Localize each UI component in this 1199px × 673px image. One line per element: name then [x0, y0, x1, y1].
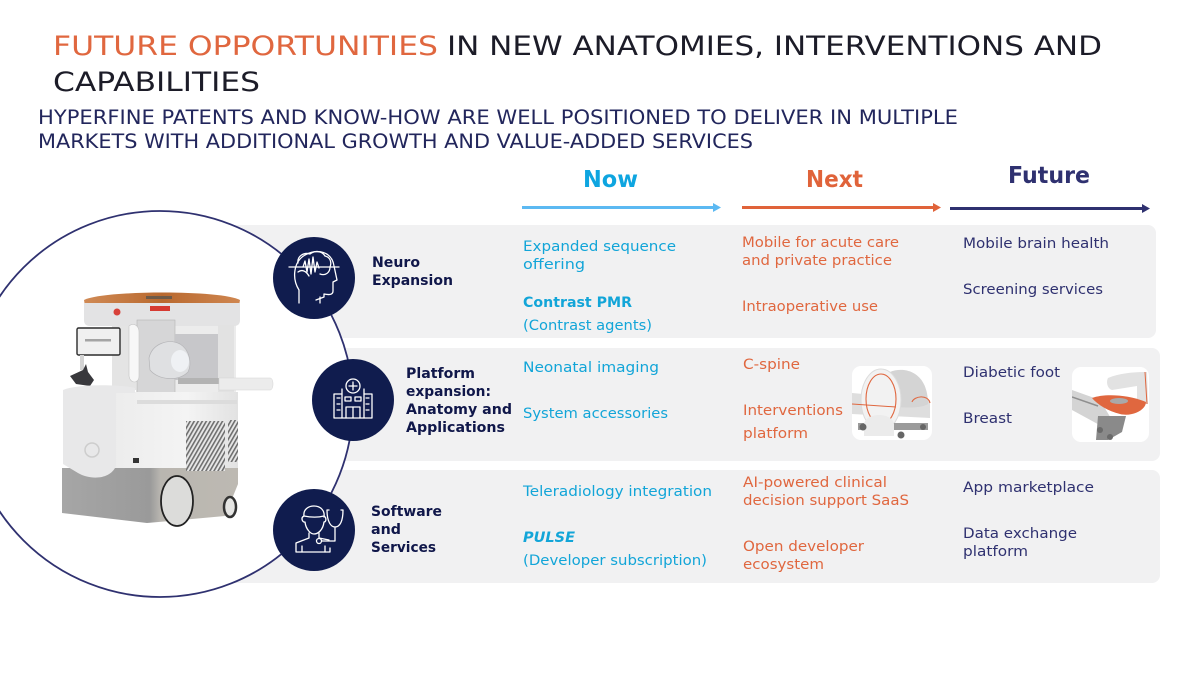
Future column text: neuro: Mobile brain health: [963, 236, 1109, 252]
Now column text: neuro: [523, 239, 676, 334]
Next column text: software: [743, 475, 909, 573]
row label: Platform expansion: expansion:: [406, 384, 491, 400]
row label: Software and Services: and: [371, 522, 401, 538]
Next column text: neuro: [742, 235, 899, 315]
panel: software and services background: [200, 470, 1160, 583]
Now column text: software: [522, 484, 712, 569]
column header: Next: Next: [806, 167, 863, 193]
Next column text: neuro: and private practice: [742, 253, 892, 269]
Next column text: platform: platform: [743, 426, 808, 442]
large circle: [0, 211, 353, 597]
Now column text: neuro: offering: [523, 257, 585, 273]
Next column text: software: decision support SaaS: [743, 493, 909, 509]
row label: Software and Services: [371, 504, 442, 556]
device top orange disc: [84, 292, 240, 306]
Now column text: platform: System accessories: [523, 406, 668, 422]
device illustration: [62, 292, 273, 526]
Next column text: platform: Interventions: [743, 403, 843, 419]
Now column text: software: PULSE: [523, 530, 575, 546]
title: CAPABILITIES: [53, 67, 260, 98]
Future column text: software: platform: [963, 544, 1028, 560]
column header: Future: Future: [1008, 163, 1090, 189]
Now column text: neuro: Expanded sequence: [523, 239, 676, 255]
row label: Platform expansion: [406, 366, 512, 436]
device joystick: [70, 364, 94, 386]
thumbnail: interventions platform scanner: [852, 366, 932, 440]
subtitle: MARKETS WITH ADDITIONAL GROWTH AND VALUE-ADDED SERVICES: [38, 130, 753, 153]
Now column text: software: Teleradiology integration: [522, 484, 712, 500]
column header: Future: [950, 163, 1150, 213]
Next column text: software: Open developer: [743, 539, 864, 555]
Next column text: software: ecosystem: [743, 557, 824, 573]
Next column text: neuro: Mobile for acute care: [742, 235, 899, 251]
Now column text: platform: [523, 360, 668, 422]
device lower body: [110, 392, 238, 472]
row label: Neuro Expansion: Neuro: [372, 255, 420, 271]
device screen: [77, 328, 120, 355]
Future column text: platform: Breast: [963, 411, 1013, 427]
panel: platform expansion background: [200, 348, 1160, 461]
Next column text: software: AI-powered clinical: [743, 475, 887, 491]
title: FUTURE OPPORTUNITIES: [53, 31, 438, 62]
subtitle: [38, 106, 958, 153]
Future column text: software: App marketplace: [963, 480, 1094, 496]
Future column text: platform: [963, 365, 1061, 427]
row label: Platform expansion: Applications: [406, 420, 505, 436]
row label: Software and Services: Services: [371, 540, 436, 556]
subtitle: HYPERFINE PATENTS AND KNOW-HOW ARE WELL POSITIONED TO DELIVER IN MULTIPLE: [38, 106, 958, 129]
column header: Now: Now: [583, 167, 638, 193]
Future column text: software: Data exchange: [963, 526, 1077, 542]
row label: Neuro Expansion: [372, 255, 453, 289]
device window and gantry: [137, 320, 175, 402]
title: IN NEW ANATOMIES, INTERVENTIONS AND: [447, 31, 1102, 62]
thumbnail: foot and breast scanner: [1072, 367, 1149, 442]
icon: hospital building: [312, 359, 394, 441]
device grey base: [62, 468, 238, 523]
Future column text: software: [963, 480, 1094, 560]
device column and pillars: [112, 320, 138, 390]
title: [53, 31, 1102, 98]
Next column text: platform: C-spine: [743, 357, 800, 373]
device wheel: [161, 476, 193, 526]
row label: Platform expansion: Platform: [406, 366, 475, 382]
Future column text: neuro: Screening services: [963, 282, 1103, 298]
Now column text: software: (Developer subscription): [523, 553, 707, 569]
icon: doctor with stethoscope: [273, 489, 355, 571]
panel: neuro expansion background: [200, 225, 1156, 338]
row label: Platform expansion: Anatomy and: [406, 402, 512, 418]
column header: Now: [522, 167, 721, 212]
Next column text: neuro: Intraoperative use: [742, 299, 878, 315]
Future column text: neuro: [963, 236, 1109, 298]
device vents: [186, 421, 225, 471]
icon: head with brain wave: [273, 237, 355, 319]
row label: Software and Services: Software: [371, 504, 442, 520]
patient table: [178, 378, 220, 384]
column header: Next: [742, 167, 941, 212]
Next column text: platform: [743, 357, 843, 442]
device side bulge: [63, 385, 135, 478]
Now column text: neuro: (Contrast agents): [523, 318, 652, 334]
Now column text: platform: Neonatal imaging: [523, 360, 659, 376]
row label: Neuro Expansion: Expansion: [372, 273, 453, 289]
Now column text: neuro: Contrast PMR: [523, 295, 632, 311]
Future column text: platform: Diabetic foot: [963, 365, 1061, 381]
device top collar: [84, 303, 240, 326]
